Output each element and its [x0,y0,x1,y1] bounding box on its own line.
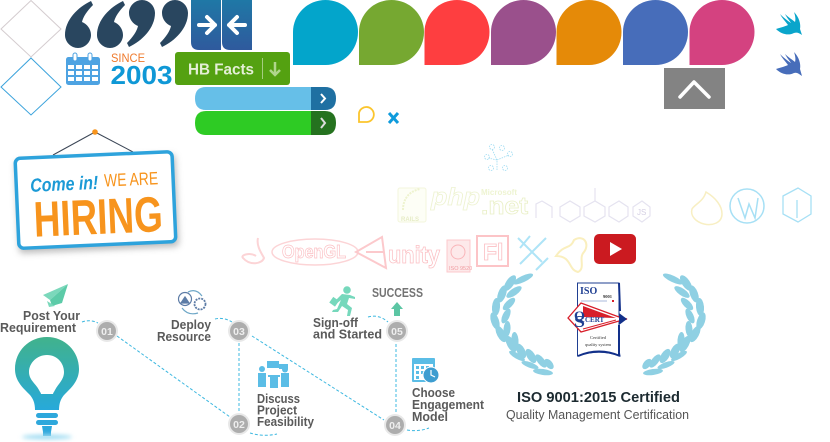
text: post your requirement: Post Your [23,308,80,323]
faint logo: rails [398,188,426,223]
faint logo: node js [536,188,650,222]
icon: meeting [258,361,289,388]
icon: swift bird cyan [776,12,802,35]
ISO QS Cert badge: 9001 [603,294,613,299]
faint logo: wordpress [730,189,764,223]
icon: light bulb [15,337,79,440]
text: deploy resource: Deploy [171,317,212,332]
coloured teardrop: green [359,0,424,65]
text: discuss project feasibility: Project [257,402,298,418]
text: sign-off and started [313,315,382,342]
icon: running man [329,286,355,316]
ISO QS Cert badge: S [574,312,585,331]
text: discuss project feasibility: Feasibility [257,414,315,429]
step 03: 03 [233,326,245,338]
ISO QS Cert badge: CERT [585,316,605,324]
button: light blue pill [195,87,336,110]
faint logo: red bird swirl [242,238,264,263]
step 03 [228,320,250,342]
step 01 [96,320,118,342]
coloured teardrop: cyan [293,0,358,65]
button: green pill [195,111,336,135]
icon: up arrow [391,302,403,316]
subheading: quality management certification: Quality Management Certification [506,407,689,422]
step 04 [384,414,406,436]
text: deploy resource: Resource [157,329,211,344]
icon: swift bird blue [776,52,802,76]
process connectors [82,316,429,435]
hiring sign: WE ARE [104,168,159,191]
laurel wreath left [488,271,556,376]
text: post your requirement [0,308,80,335]
faint logo: cloud tree [484,144,512,170]
coloured teardrop: pink [690,0,754,65]
icon: calendar [66,53,100,85]
text: choose engagement model: Engagement [412,397,485,412]
text: sign-off and started: and Started [313,326,382,342]
text: choose engagement model: Choose [412,385,455,400]
icon: yellow speech drop [359,107,374,122]
step 05 [386,320,408,342]
laurel wreath right [640,271,708,376]
faint logo: unity [356,237,441,269]
step 05: 05 [391,326,403,338]
hiring sign [15,129,179,253]
icon: youtube [594,234,636,264]
text: choose engagement model [412,385,485,424]
icon: people and gear [178,291,206,314]
faint logo: magento [783,188,811,222]
faint logo: yellow swirl [556,238,586,272]
icon: blue close cross [389,113,398,123]
hiring sign: Come in! [30,173,99,197]
faint logo: php: php [430,184,480,211]
icon: left arrow button [222,0,252,50]
icon: blue diamond outline [1,58,61,115]
icon: calendar clock [412,358,439,383]
text: success: SUCCESS [372,285,423,300]
hiring sign: HIRING [33,186,164,248]
coloured teardrop: red [424,0,490,65]
step 04: 04 [389,420,401,432]
faint logo: emblem [447,240,472,272]
text: discuss project feasibility: Discuss [257,391,300,406]
faint logo: flash: Fl [483,239,503,265]
text: sign-off and started: Sign-off [313,315,359,330]
step 02 [228,413,250,435]
step 02: 02 [233,419,245,431]
text: deploy resource [157,317,212,344]
ISO QS Cert badge [568,283,627,356]
icon: quotation marks [65,0,188,48]
icon: grey diamond outline [1,0,61,57]
since 2003 label: SINCE [111,53,145,65]
ISO QS Cert badge: ISO [580,286,597,297]
faint logo: unity: unity [388,242,441,269]
faint logo: drupal [692,192,722,225]
text: discuss project feasibility [257,391,315,429]
coloured teardrop: purple [491,0,556,65]
coloured teardrop: blue [623,0,688,65]
faint logo: opengl: OpenGL [282,242,346,262]
since 2003 label: 2003 [110,60,172,90]
ISO QS Cert badge: Certified [590,335,607,340]
button: grey back to top [664,68,725,109]
faint logo: node js: JS [637,208,646,217]
faint logo: emblem: ISO 9520 [449,266,472,272]
text: choose engagement model: Model [412,409,448,424]
button: HB Facts [175,52,290,85]
faint logo: microsoft .net: .net [481,193,528,220]
faint logo: joomla [518,236,548,270]
button: HB Facts: HB Facts [188,62,254,78]
faint logo: flash [477,236,508,266]
icon: right arrow button [191,0,221,50]
text: post your requirement: Requirement [0,320,77,335]
icon: paper plane [43,284,68,307]
ISO QS Cert badge: quality system [585,342,612,347]
faint logo: rails: RAILS [401,217,419,223]
ISO QS Cert badge: Q [574,308,585,323]
faint logo: opengl [272,239,358,265]
heading: ISO 9001:2015 Certified: ISO 9001:2015 Certified [517,390,680,406]
coloured teardrop: orange [556,0,622,65]
step 01: 01 [101,326,113,338]
faint logo: microsoft .net: Microsoft [481,188,517,197]
